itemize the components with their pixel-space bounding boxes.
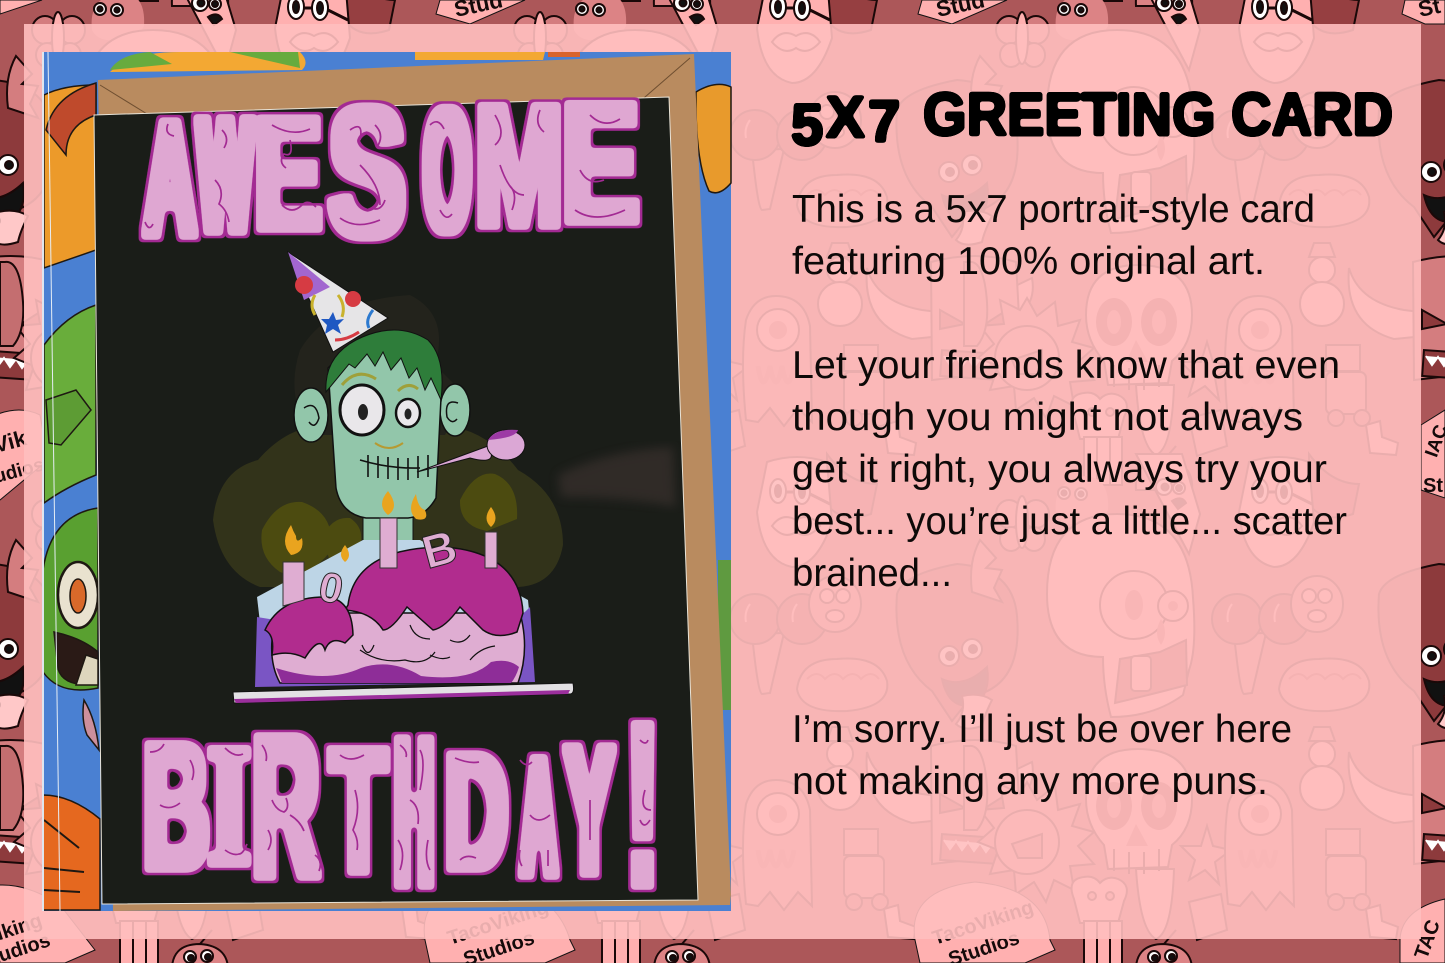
headline: BIRTHDAY!: Y (565, 707, 614, 912)
labels: studio name, bottom: TacoViking (930, 896, 1036, 950)
candles: B (417, 520, 462, 579)
headline: BIRTHDAY!: ! (626, 674, 659, 934)
text block: description paragraph 2: brained... (792, 552, 952, 595)
heading: 5x7 greeting card: 5X7 (791, 85, 900, 158)
labels: studio name, bottom (0, 882, 1445, 963)
text block: description paragraph 1: This is a 5x7 portrait-style card (792, 188, 1315, 231)
headline: AWESOME: A (144, 86, 196, 270)
labels: studio name, top (0, 0, 1445, 24)
candles: 0 (315, 562, 347, 613)
text block: description paragraph 2: get it right, you always try your (792, 448, 1327, 491)
labels: studio name, sides (0, 410, 1445, 500)
labels: studio name, sides: St (1423, 475, 1443, 497)
text block: description paragraph 2: best... you’re just a little... scatter (792, 500, 1347, 543)
text block: description paragraph 1: featuring 100% original art. (792, 240, 1265, 283)
headline: AWESOME: S (328, 69, 406, 274)
text block: description paragraph 2: though you might not always (792, 396, 1303, 439)
headline: AWESOME: E (561, 68, 640, 257)
glare on card (558, 447, 676, 507)
headline: BIRTHDAY!: B (143, 707, 209, 907)
heading: 5x7 greeting card: GREETING CARD (923, 81, 1393, 148)
headline: BIRTHDAY!: H (395, 693, 433, 930)
text block: description paragraph 3: not making any more puns. (792, 760, 1268, 803)
headline: BIRTHDAY!: A (521, 723, 556, 912)
headline: BIRTHDAY!: I (208, 710, 250, 901)
text block: description paragraph 3: I’m sorry. I’ll just be over here (792, 708, 1292, 751)
heading: 5x7 greeting card (791, 81, 1393, 158)
headline: AWESOME (144, 68, 640, 274)
headline: BIRTHDAY!: D (445, 719, 508, 903)
text block: description paragraph 3 (792, 708, 1292, 803)
illustration: shirt (257, 540, 532, 640)
illustration: birthday cake (265, 491, 525, 683)
illustration: zombie party guest (294, 295, 470, 544)
headline: BIRTHDAY!: R (252, 695, 319, 920)
headline: BIRTHDAY!: T (330, 712, 387, 909)
text block: description paragraph 2: Let your friends know that even (792, 344, 1340, 387)
text block: description paragraph 2 (792, 344, 1347, 595)
labels: studio name, bottom: TAC (1411, 917, 1445, 962)
candles (283, 491, 497, 613)
illustration: party blower (417, 430, 525, 472)
labels: studio name, bottom: TacoViking (445, 896, 551, 950)
headline: BIRTHDAY! (143, 674, 659, 934)
headline: AWESOME: O (424, 72, 471, 267)
headline: AWESOME: W (198, 83, 253, 266)
illustration: party hat (288, 252, 388, 352)
text block: description paragraph 1 (792, 188, 1315, 283)
illustration: glow behind character (213, 425, 563, 587)
card face (94, 68, 698, 934)
headline: AWESOME: E (254, 87, 322, 262)
illustration: cake plate (233, 683, 574, 703)
headline: AWESOME: M (475, 71, 563, 262)
kraft envelope (98, 54, 731, 911)
photo backdrop: blue patterned paper (42, 52, 731, 911)
photo of the greeting card (42, 52, 731, 934)
